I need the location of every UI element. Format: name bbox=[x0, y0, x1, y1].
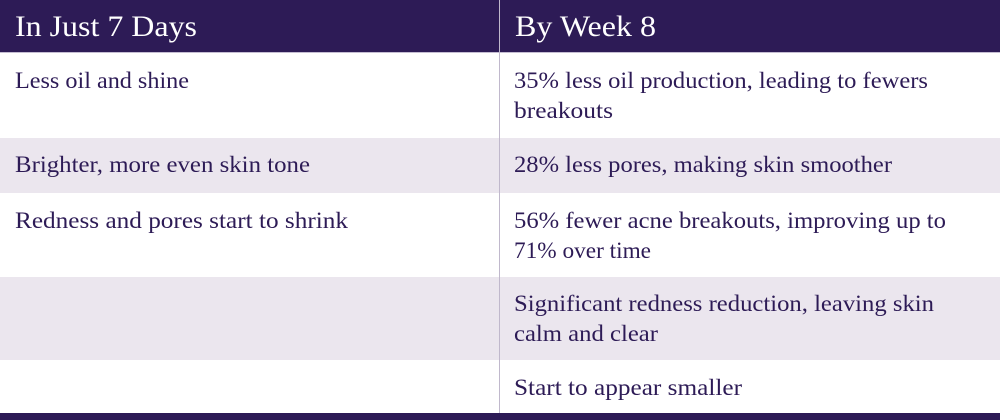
cell: week 8 redness: Significant redness reduction, leaving skin bbox=[514, 291, 935, 316]
cell: week 8 redness bbox=[514, 291, 935, 346]
row 2 bbox=[0, 138, 1000, 193]
cell: week 8 oil: breakouts bbox=[514, 98, 613, 123]
cell: 7 days redness: Redness and pores start to shrink bbox=[15, 208, 349, 233]
row 1 bbox=[0, 53, 1000, 138]
heading: By Week 8: By Week 8 bbox=[515, 10, 656, 43]
cell: week 8 acne: 71% over time bbox=[514, 238, 651, 263]
cell: week 8 acne: 56% fewer acne breakouts, improving up to bbox=[514, 208, 946, 233]
cell: 7 days tone: Brighter, more even skin tone bbox=[15, 152, 310, 177]
row 5 bbox=[0, 360, 1000, 413]
cell: week 8 smaller: Start to appear smaller bbox=[514, 375, 742, 400]
row 3 bbox=[0, 193, 1000, 277]
cell: week 8 oil bbox=[514, 68, 928, 123]
footer bar bbox=[0, 413, 1000, 420]
cell: week 8 pores: 28% less pores, making skin smoother bbox=[514, 152, 892, 177]
cell: week 8 acne bbox=[514, 208, 946, 263]
header row bbox=[0, 0, 1000, 53]
row 4 bbox=[0, 277, 1000, 360]
cell: week 8 oil: 35% less oil production, leading to fewers bbox=[514, 68, 928, 93]
cell: 7 days oil: Less oil and shine bbox=[15, 68, 189, 93]
cell: week 8 redness: calm and clear bbox=[514, 321, 658, 346]
heading: In Just 7 Days: In Just 7 Days bbox=[15, 10, 197, 43]
